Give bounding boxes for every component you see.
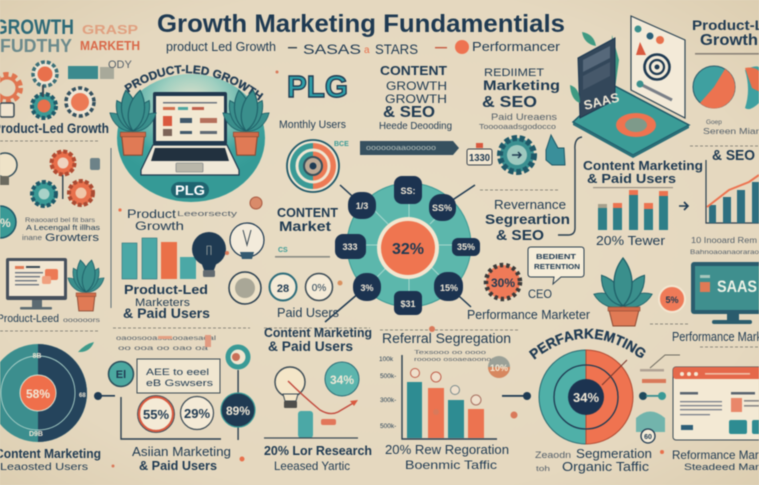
heading: content marketing centre: & Paid Users	[268, 339, 353, 354]
heading: product growth right: Growth	[700, 32, 758, 49]
badge: 30% gear	[486, 265, 520, 299]
icon: teal tag	[546, 135, 565, 165]
bar chart: referral: 300k-	[380, 397, 396, 404]
heading: product growth right: Product-L	[692, 17, 759, 33]
heading: referral segregation: Texsooo oo oooo	[414, 350, 486, 356]
stat circles: 55%, 29%, 89%	[138, 393, 255, 432]
icon: browser window	[673, 367, 759, 440]
hub nodes: 15%	[440, 283, 458, 293]
callout box	[137, 359, 220, 393]
heading: seo right: & SEO	[712, 147, 755, 164]
hub centre value	[377, 217, 439, 279]
icon: teal gear	[500, 138, 534, 172]
stat circles row	[229, 272, 342, 304]
stat circles row: 0%	[312, 283, 326, 294]
chart: target dial: BCE	[334, 141, 349, 148]
heading: recruit marketing and seo: Marketing	[483, 77, 560, 93]
top-left masthead	[0, 16, 140, 79]
icon: right plant	[220, 89, 272, 155]
badge pill: PLG	[175, 182, 205, 198]
banner pill: ooooooaaoooooo	[366, 145, 436, 152]
heading: recruit marketing and seo: & SEO	[482, 94, 537, 111]
label: donut footer	[535, 446, 652, 474]
top-left masthead: GRASP	[82, 22, 138, 37]
label: monthly users: Monthly Users	[279, 119, 346, 131]
donut arc heading: PERFARKEMTING	[528, 328, 646, 360]
subtitle strip: Performancer	[472, 40, 560, 54]
heading: product-led marketers: Marketers	[135, 297, 191, 309]
bar chart: referral	[379, 355, 497, 439]
icon: saas monitor	[691, 262, 759, 324]
panel dividers	[0, 141, 759, 347]
speech callout: RETENTION	[534, 264, 580, 271]
heading: product-led marketers: Product-Led	[124, 282, 208, 297]
bar chart: referral: 100k	[379, 356, 394, 363]
label: content marketing left	[0, 446, 101, 473]
callout box: eB Gswsers	[146, 378, 214, 388]
heading: content growth and seo: CONTENT	[380, 63, 447, 78]
stat box: 1330: 1330	[469, 153, 490, 164]
left small text: A Lecengal ft illhas	[26, 223, 100, 232]
label: performance footer	[660, 448, 759, 473]
label: donut footer: Segmeration	[576, 446, 652, 461]
hub nodes: SS%	[432, 203, 452, 213]
small caption: 10 Inooard Rem	[691, 236, 757, 245]
bar chart: referral: 500k-	[380, 373, 396, 380]
label: research: Leeased Yartic	[274, 459, 350, 473]
heading: revenue segregation: Segreartion	[485, 211, 570, 227]
heading: revenue segregation	[485, 197, 570, 244]
axis	[121, 397, 221, 439]
label: marketing paid users	[132, 445, 244, 473]
heading: content growth and seo: GROWTH	[386, 79, 447, 93]
heading: PLG: PLG	[287, 69, 348, 104]
icon: dark bulb	[192, 232, 226, 277]
heading: content marketing centre: Content Marketing	[264, 326, 372, 340]
stat circles: 55%, 29%, 89%: 29%	[184, 406, 210, 421]
heading: product-led marketers	[123, 282, 210, 321]
stat: 34% circle	[325, 362, 359, 396]
hub nodes: 35%	[457, 242, 475, 252]
chart: rising bars right	[706, 160, 759, 223]
donut chart: 34%	[528, 328, 646, 446]
icon: small gadget	[636, 412, 665, 443]
icon: teal badge	[108, 362, 134, 386]
speech callout	[528, 247, 584, 284]
label: research: 20% Lor Research	[264, 443, 372, 458]
leaf decoration	[78, 342, 94, 352]
title: Growth Marketing Fundamentials	[157, 10, 565, 38]
heading: content marketing centre	[264, 326, 372, 354]
connector	[558, 137, 582, 235]
chart: target dial	[287, 140, 349, 192]
label: marketing paid users: & Paid Users	[139, 459, 217, 473]
label: donut footer: toh	[536, 466, 550, 473]
label: product growth	[118, 197, 262, 233]
label: content marketing left: Leaosted Users	[0, 462, 88, 473]
heading: referral segregation	[382, 331, 511, 363]
heading: recruit marketing and seo: Paid Ureaens	[491, 112, 558, 122]
label: performance footer: Steadeed Mar	[684, 462, 759, 473]
connector dot	[94, 392, 115, 400]
subtitle strip: a	[364, 45, 370, 56]
heading: content growth and seo	[379, 63, 452, 132]
icon: left plant	[107, 89, 159, 155]
icon: laptop	[141, 92, 239, 175]
left small text: Growters	[45, 232, 100, 244]
icon: small gadget: 60	[644, 434, 652, 441]
arrow right of donut	[639, 392, 666, 400]
hub nodes: SS:	[400, 186, 416, 196]
hub centre value: 32%	[392, 241, 424, 258]
small text rows	[116, 335, 217, 352]
scattered accent marks	[112, 70, 518, 468]
label: product growth: Leeorsecty	[177, 211, 238, 218]
stat circles: 55%, 29%, 89%: 55%	[143, 407, 169, 422]
small caption	[690, 236, 759, 256]
subtitle strip: STARS	[375, 41, 418, 57]
label: referral footer: Boenmic Taffic	[405, 458, 497, 472]
label: marketing paid users: Asiian Marketing	[132, 445, 231, 459]
heading: content growth and seo: GROWTH	[385, 92, 447, 106]
label: product-lead left	[0, 313, 101, 325]
bar chart: product-led	[122, 238, 196, 279]
speech callout: BEDIENT	[536, 252, 577, 261]
stat: orange circle	[659, 286, 685, 312]
icon cluster: second gears row	[0, 152, 100, 238]
banner pill	[360, 141, 459, 155]
pie chart	[693, 66, 759, 109]
heading: content marketing and paid users: & Paid Users	[587, 171, 676, 186]
label: research	[264, 443, 372, 473]
top-left masthead: FUDTHY	[0, 36, 72, 56]
label: referral footer	[385, 442, 509, 472]
heading: product growth right	[692, 17, 759, 55]
label: 20% tewer: 20% Tewer	[596, 234, 665, 248]
hub nodes: 3%	[360, 283, 374, 293]
small captions right	[703, 119, 759, 136]
label: product-lead left: oooooors	[63, 317, 101, 324]
donut chart: 58%: 8B	[33, 353, 41, 360]
small connector lines	[640, 355, 680, 383]
heading: revenue segregation: & SEO	[496, 227, 544, 244]
heading: recruit marketing and seo: REDIIMET	[484, 67, 544, 79]
label: donut footer: Zeaodn	[535, 450, 571, 460]
donut chart: 58%: 58%	[26, 387, 50, 401]
donut chart: 58%: D9B	[29, 431, 43, 438]
stat circles: 55%, 29%, 89%: 89%	[226, 404, 250, 418]
label: paid users: Paid Users	[277, 306, 339, 320]
icon: isometric saas platform: SAAS	[582, 90, 621, 113]
left small text: Reaooard bel fit bars	[25, 218, 95, 224]
heading: content marketing and paid users: Content Marketing	[583, 158, 703, 173]
top-left masthead: ODY	[108, 59, 132, 71]
heading: referral segregation: rooooo osoaeaoonoe	[414, 357, 496, 363]
icon: research bulb chart	[264, 367, 358, 438]
callout box: AEE to eeel	[146, 367, 209, 377]
hub nodes: $31	[400, 299, 416, 309]
stat: 10% circle: 10%	[490, 363, 508, 373]
label: content market: CONTENT	[277, 205, 338, 220]
heading: content growth and seo: Heede Deooding	[379, 120, 452, 132]
left small text	[22, 218, 100, 244]
heading: revenue segregation: Revernance	[494, 197, 566, 212]
arrow	[679, 202, 688, 210]
label: referral footer: 20% Rew Regoration	[385, 442, 509, 457]
heading: content marketing and paid users	[583, 158, 703, 188]
label: content market	[277, 205, 338, 234]
subtitle strip	[166, 40, 560, 57]
heading: recruit marketing and seo: Tooooaadsgodocco	[479, 124, 556, 131]
stat: teal note: CS	[278, 247, 288, 254]
bar chart: paid users	[598, 190, 668, 230]
stat: 10% circle	[488, 356, 510, 378]
hero: product-led growth laptop badge	[108, 64, 270, 203]
stat: orange circle: 5%	[665, 295, 679, 305]
icon: teal badge: El	[116, 369, 126, 381]
heading: content growth and seo: & SEO	[383, 104, 435, 121]
label: ceo: CEO	[528, 287, 552, 301]
icon: teal ring node	[228, 347, 248, 440]
label: product growth: Product	[127, 207, 177, 221]
hub nodes	[335, 176, 480, 315]
top-left masthead: MARKETH	[80, 39, 140, 53]
left small text: inane	[22, 235, 42, 242]
small text rows: oaoosooasoaooaesaoal	[116, 335, 217, 342]
donut chart: 58%: 68	[79, 393, 86, 399]
small captions right: Goep	[706, 119, 722, 126]
donut chart: 58%	[0, 344, 87, 442]
small captions right: Sereen Miar	[703, 127, 759, 136]
heading: product-led marketers: & Paid Users	[123, 306, 210, 321]
subtitle strip: product Led Growth	[166, 40, 276, 54]
heading: recruit marketing and seo	[479, 67, 560, 131]
stat: 34% circle: 34%	[330, 373, 354, 387]
icon: light bulb	[230, 223, 264, 259]
small text rows: oo ooa oo oao oa	[118, 345, 209, 352]
icon: desktop monitor with plant	[6, 258, 107, 311]
hub nodes: 1/3	[356, 201, 368, 211]
label: product growth: Growth	[135, 219, 184, 233]
arrow left of donut	[502, 392, 531, 400]
hub nodes: 333	[342, 242, 358, 252]
label: performance marketer: Performance Marketer	[467, 308, 590, 322]
stat box: 1330	[467, 143, 492, 165]
icon: large plant	[592, 258, 654, 326]
hub diagram: segmentation wheel	[325, 176, 480, 322]
bar chart: referral: 500k-	[380, 423, 396, 430]
subtitle strip: SASAS	[303, 41, 361, 57]
label: content market: Market	[279, 219, 332, 234]
label: donut footer: Organic Taffic	[562, 459, 650, 474]
small caption: Bahnoaoanaorarao	[690, 250, 759, 256]
icon cluster: second gears row: %	[0, 216, 11, 230]
icon cluster: gears and lightbulb	[0, 62, 94, 118]
badge: 30% gear: 30%	[491, 276, 515, 290]
badge arc heading: PRODUCT-LED GROWTH	[124, 64, 264, 102]
stat: teal note	[275, 247, 330, 258]
heading: referral segregation: Referral Segregation	[382, 331, 511, 346]
donut chart: 34%: 34%	[573, 390, 599, 405]
stat circles row: 28	[277, 283, 289, 295]
icon: isometric saas platform	[570, 16, 689, 158]
